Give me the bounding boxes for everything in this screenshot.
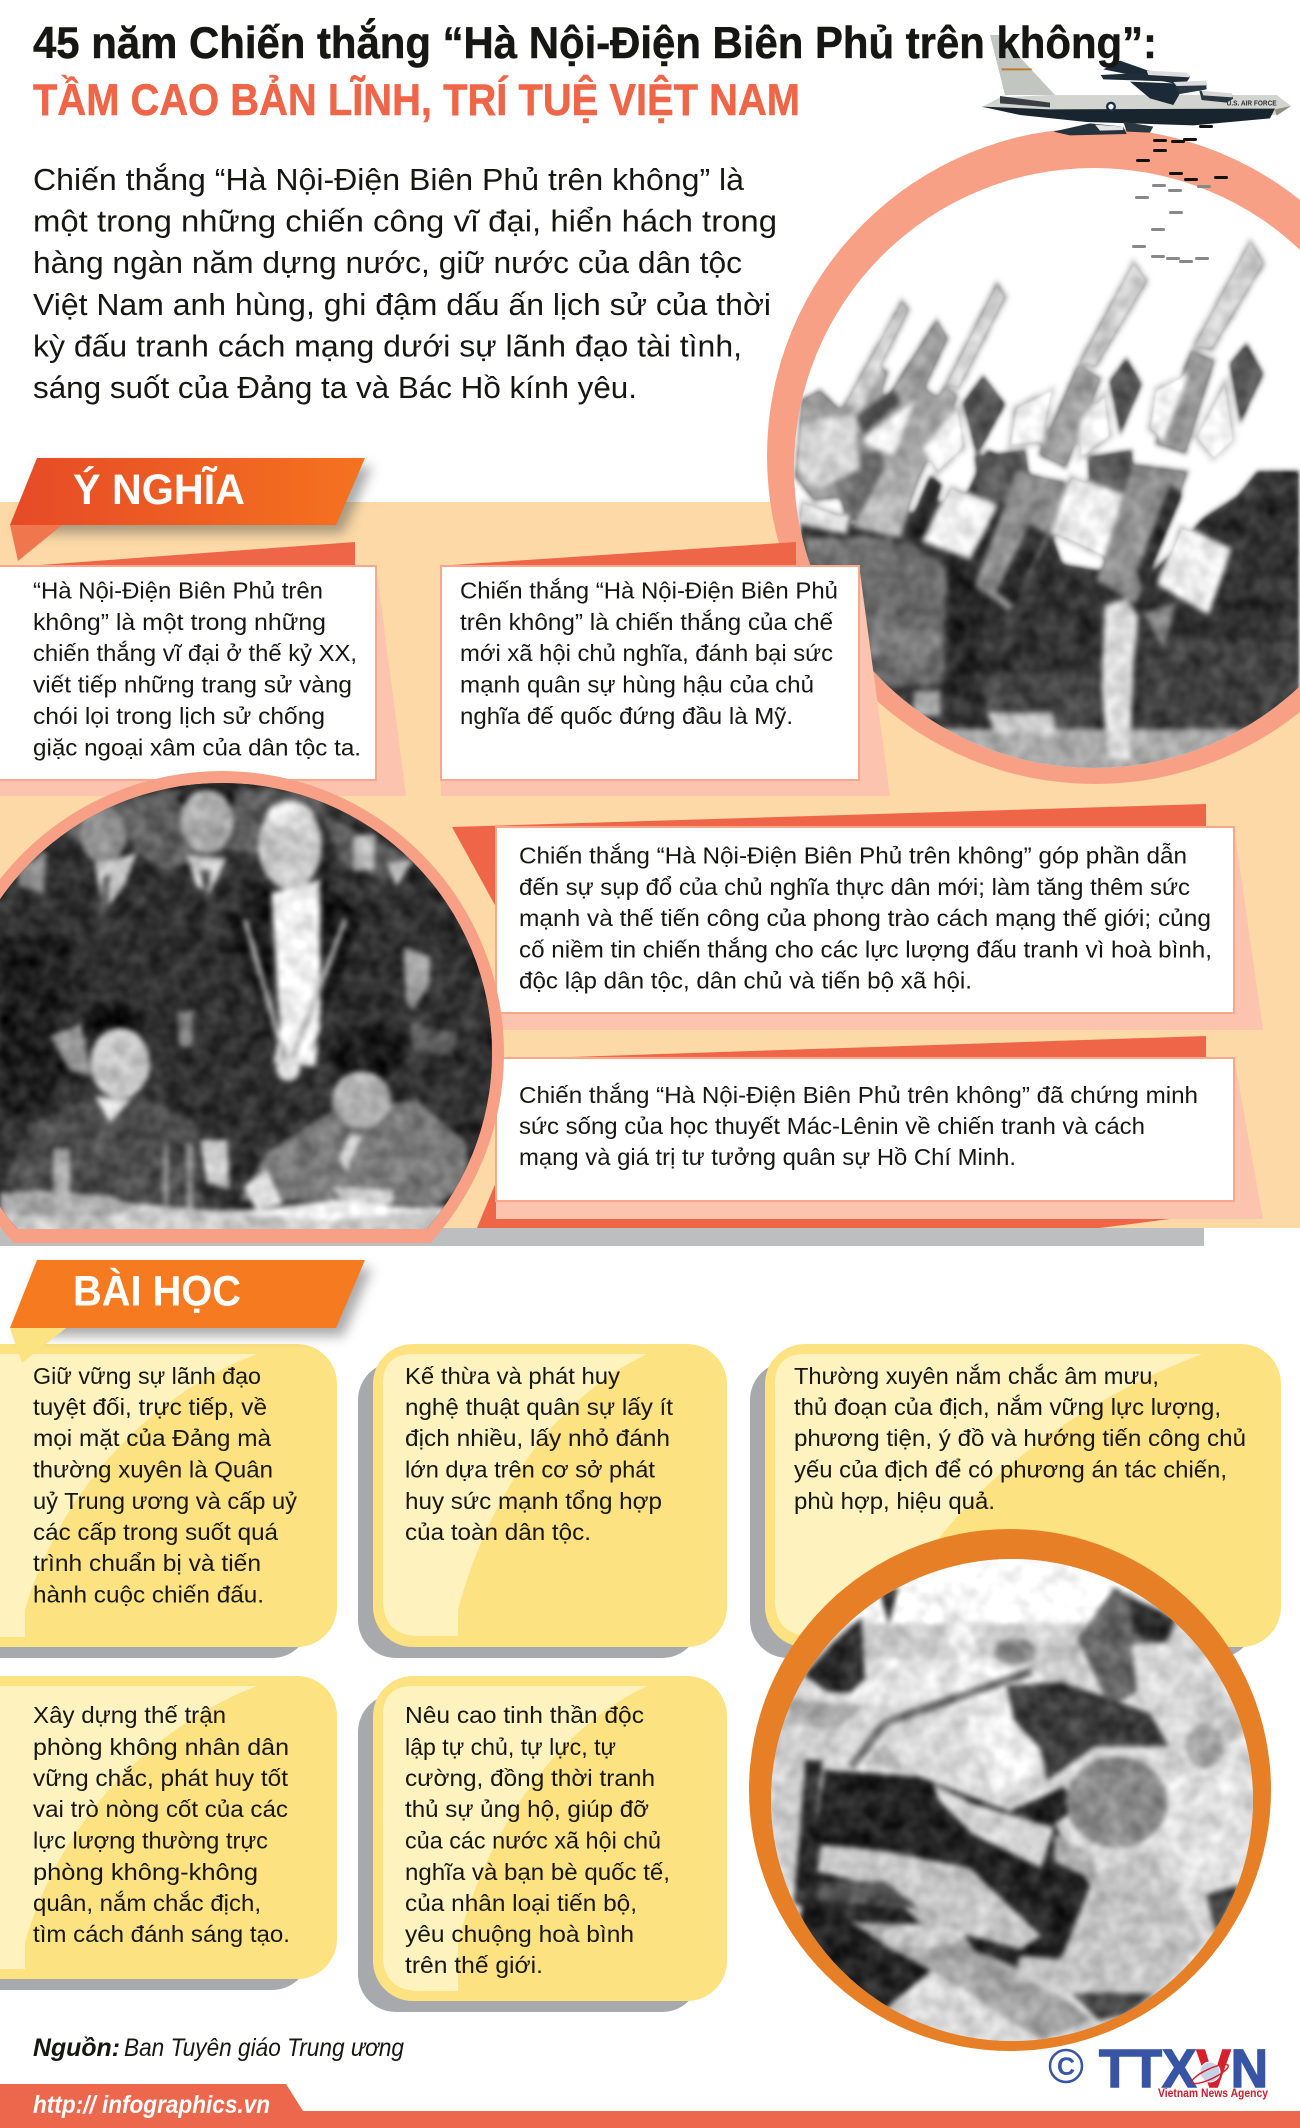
intro text [33, 162, 777, 405]
intro text: Việt Nam anh hùng, ghi đậm dấu ấn lịch sử của thời [33, 287, 771, 322]
intro text: kỳ đấu tranh cách mạng dưới sự lãnh đạo tài tình, [33, 328, 742, 364]
rocket 1 [843, 297, 912, 413]
text: card 4: mạng và giá trị tư tưởng quân sự Hồ Chí Minh. [519, 1144, 1016, 1170]
text: lesson B [405, 1363, 673, 1545]
rocket 3 [1077, 257, 1150, 370]
text: lesson B: địch nhiều, lấy nhỏ đánh [405, 1425, 670, 1451]
text: lesson D: tìm cách đánh sáng tạo. [33, 1921, 290, 1947]
card: y nghia 1 [0, 542, 406, 796]
panel: lesson card B [358, 1344, 727, 1658]
photo ring: signing ceremony [0, 771, 504, 1243]
text: lesson A: trình chuẩn bị và tiến [33, 1550, 261, 1576]
text: card 1: không” là một trong những [33, 609, 326, 635]
text: lesson C: Thường xuyên nắm chắc âm mưu, [794, 1363, 1159, 1389]
text: card 4: Chiến thắng “Hà Nội-Điện Biên Phủ trên không” đã chứng minh [519, 1082, 1198, 1108]
section banner: Ý NGHĨA [10, 458, 372, 561]
card: y nghia 2 [441, 542, 890, 796]
text: card 3: độc lập dân tộc, dân chủ và tiến bộ xã hội. [519, 968, 972, 994]
panel: lesson card A [0, 1344, 337, 1658]
text: lesson D: Xây dựng thế trận [33, 1702, 226, 1728]
text: card 1: chói lọi trong lịch sử chống [33, 703, 325, 729]
panel: lesson card D [0, 1676, 337, 1990]
text: lesson D: lực lượng thường trực [33, 1828, 268, 1854]
panel: lesson card E [358, 1676, 727, 2012]
photo: missile launchers [780, 160, 1300, 780]
panel bottom shadow [0, 1228, 1204, 1246]
text: lesson E: nghĩa và bạn bè quốc tế, [405, 1859, 670, 1885]
heading: Ý NGHĨA [73, 466, 245, 514]
intro text: hàng ngàn năm dựng nước, giữ nước của dân tộc [33, 245, 742, 280]
falling bombs [1132, 125, 1228, 263]
panel: lesson card C [750, 1344, 1281, 1658]
logo: TTXVN: C [1057, 2053, 1075, 2081]
photo: anti-aircraft gunners [771, 1559, 1253, 2041]
text: lesson A: hành cuộc chiến đấu. [33, 1582, 264, 1608]
source: Nguồn: [33, 2034, 120, 2062]
text: card 4: sức sống của học thuyết Mác-Lênin về chiến tranh và cách [519, 1113, 1145, 1139]
logo: TTXVN: Vietnam News Agency [1158, 2086, 1268, 2100]
logo: TTXVN: TTXVN [1099, 2039, 1268, 2099]
text: lesson B: huy sức mạnh tổng hợp [405, 1488, 662, 1514]
section banner: BÀI HỌC [10, 1260, 372, 1363]
heavy bomber [982, 35, 1291, 135]
text: card 1: “Hà Nội-Điện Biên Phủ trên [33, 578, 323, 604]
rocket 2 [943, 279, 1008, 391]
text: card 3: Chiến thắng “Hà Nội-Điện Biên Phủ trên không” góp phần dẫn [519, 842, 1187, 868]
photo ring: missiles [767, 128, 1300, 784]
text: lesson A [33, 1363, 297, 1608]
text: card 3: đến sự sụp đổ của chủ nghĩa thực dân mới; làm tăng thêm sức [519, 874, 1190, 900]
text: lesson E: Nêu cao tinh thần độc [405, 1702, 644, 1728]
text: lesson E: yêu chuộng hoà bình [405, 1921, 634, 1947]
text: card 2 [460, 578, 838, 729]
text: lesson C: phù hợp, hiệu quả. [794, 1488, 995, 1514]
text: lesson A: uỷ Trung ương và cấp uỷ [33, 1488, 297, 1514]
text: lesson E: thủ sự ủng hộ, giúp đỡ [405, 1796, 649, 1822]
footer url: http:// infographics.vn [33, 2091, 270, 2119]
text: card 2: nghĩa đế quốc đứng đầu là Mỹ. [460, 703, 793, 729]
text: lesson E: của các nước xã hội chủ [405, 1828, 661, 1854]
text: card 2: mạnh quân sự hùng hậu của chủ [460, 672, 814, 698]
text: card 4 [519, 1082, 1198, 1170]
text: card 1: giặc ngoại xâm của dân tộc ta. [33, 734, 361, 760]
text: card 3: cố niềm tin chiến thắng cho các lực lượng đấu tranh vì hoà bình, [519, 936, 1212, 962]
text: card 1: viết tiếp những trang sử vàng [33, 672, 352, 698]
text: card 3 [519, 842, 1212, 994]
source [33, 2034, 404, 2062]
text: lesson E [405, 1702, 670, 1978]
text: lesson C: thủ đoạn của địch, nắm vững lực lượng, [794, 1394, 1221, 1420]
text: lesson E: trên thế giới. [405, 1952, 543, 1978]
text: lesson E: cường, đồng thời tranh [405, 1765, 655, 1791]
text: lesson A: tuyệt đối, trực tiếp, về [33, 1394, 267, 1420]
text: card 2: Chiến thắng “Hà Nội-Điện Biên Phủ [460, 578, 838, 604]
subtitle: TẦM CAO BẢN LĨNH, TRÍ TUỆ VIỆT NAM [33, 75, 800, 125]
text: lesson E: của nhân loại tiến bộ, [405, 1890, 637, 1916]
text: lesson B: của toàn dân tộc. [405, 1519, 591, 1545]
text: lesson A: mọi mặt của Đảng mà [33, 1425, 272, 1451]
text: lesson C: phương tiện, ý đồ và hướng tiến công chủ [794, 1425, 1246, 1451]
text: lesson B: Kế thừa và phát huy [405, 1363, 620, 1389]
text: lesson D [33, 1702, 290, 1947]
text: lesson B: nghệ thuật quân sự lấy ít [405, 1394, 673, 1420]
text: lesson D: quân, nắm chắc địch, [33, 1890, 261, 1916]
text: card 1: chiến thắng vĩ đại ở thế kỷ XX, [33, 640, 357, 666]
text: card 1 [33, 578, 361, 760]
source: Ban Tuyên giáo Trung ương [124, 2034, 404, 2062]
text: lesson E: lập tự chủ, tự lực, tự [405, 1734, 616, 1760]
text: lesson C: yếu của địch để có phương án tác chiến, [794, 1456, 1227, 1482]
text: lesson D: vững chắc, phát huy tốt [33, 1765, 288, 1791]
text: lesson D: phòng không-không [33, 1859, 258, 1885]
text: card 2: trên không” là chiến thắng của chế [460, 609, 833, 635]
card: y nghia 4 [477, 1036, 1263, 1228]
text: lesson B: lớn dựa trên cơ sở phát [405, 1456, 655, 1482]
text: lesson A: Giữ vững sự lãnh đạo [33, 1363, 261, 1389]
text: lesson D: phòng không nhân dân [33, 1734, 289, 1760]
intro text: một trong những chiến công vĩ đại, hiển hách trong [33, 204, 777, 238]
title [33, 18, 1157, 125]
aircraft marking: U.S. AIR FORCE [1227, 100, 1277, 107]
man in white [1102, 599, 1138, 759]
photo: signing ceremony [0, 783, 492, 1229]
rocket 4 [1190, 236, 1267, 352]
intro text: Chiến thắng “Hà Nội-Điện Biên Phủ trên không” là [33, 162, 745, 197]
text: lesson A: các cấp trong suốt quá [33, 1519, 279, 1545]
photo ring: anti-aircraft gunners [749, 1529, 1277, 2051]
card: y nghia 3 [452, 804, 1263, 1030]
text: lesson C [794, 1363, 1246, 1514]
text: lesson A: thường xuyên là Quân [33, 1456, 273, 1482]
intro text: sáng suốt của Đảng ta và Bác Hồ kính yêu. [33, 370, 637, 405]
text: card 3: mạnh và thế tiến công của phong trào cách mạng thế giới; củng [519, 905, 1211, 931]
panel: Ý nghĩa background [0, 502, 1300, 1228]
heading: BÀI HỌC [73, 1268, 241, 1316]
footer bar [0, 2084, 1300, 2128]
text: card 2: mới xã hội chủ nghĩa, đánh bại sức [460, 640, 833, 666]
title: 45 năm Chiến thắng “Hà Nội-Điện Biên Phủ trên không”: [33, 18, 1157, 68]
text: lesson D: vai trò nòng cốt của các [33, 1796, 288, 1822]
